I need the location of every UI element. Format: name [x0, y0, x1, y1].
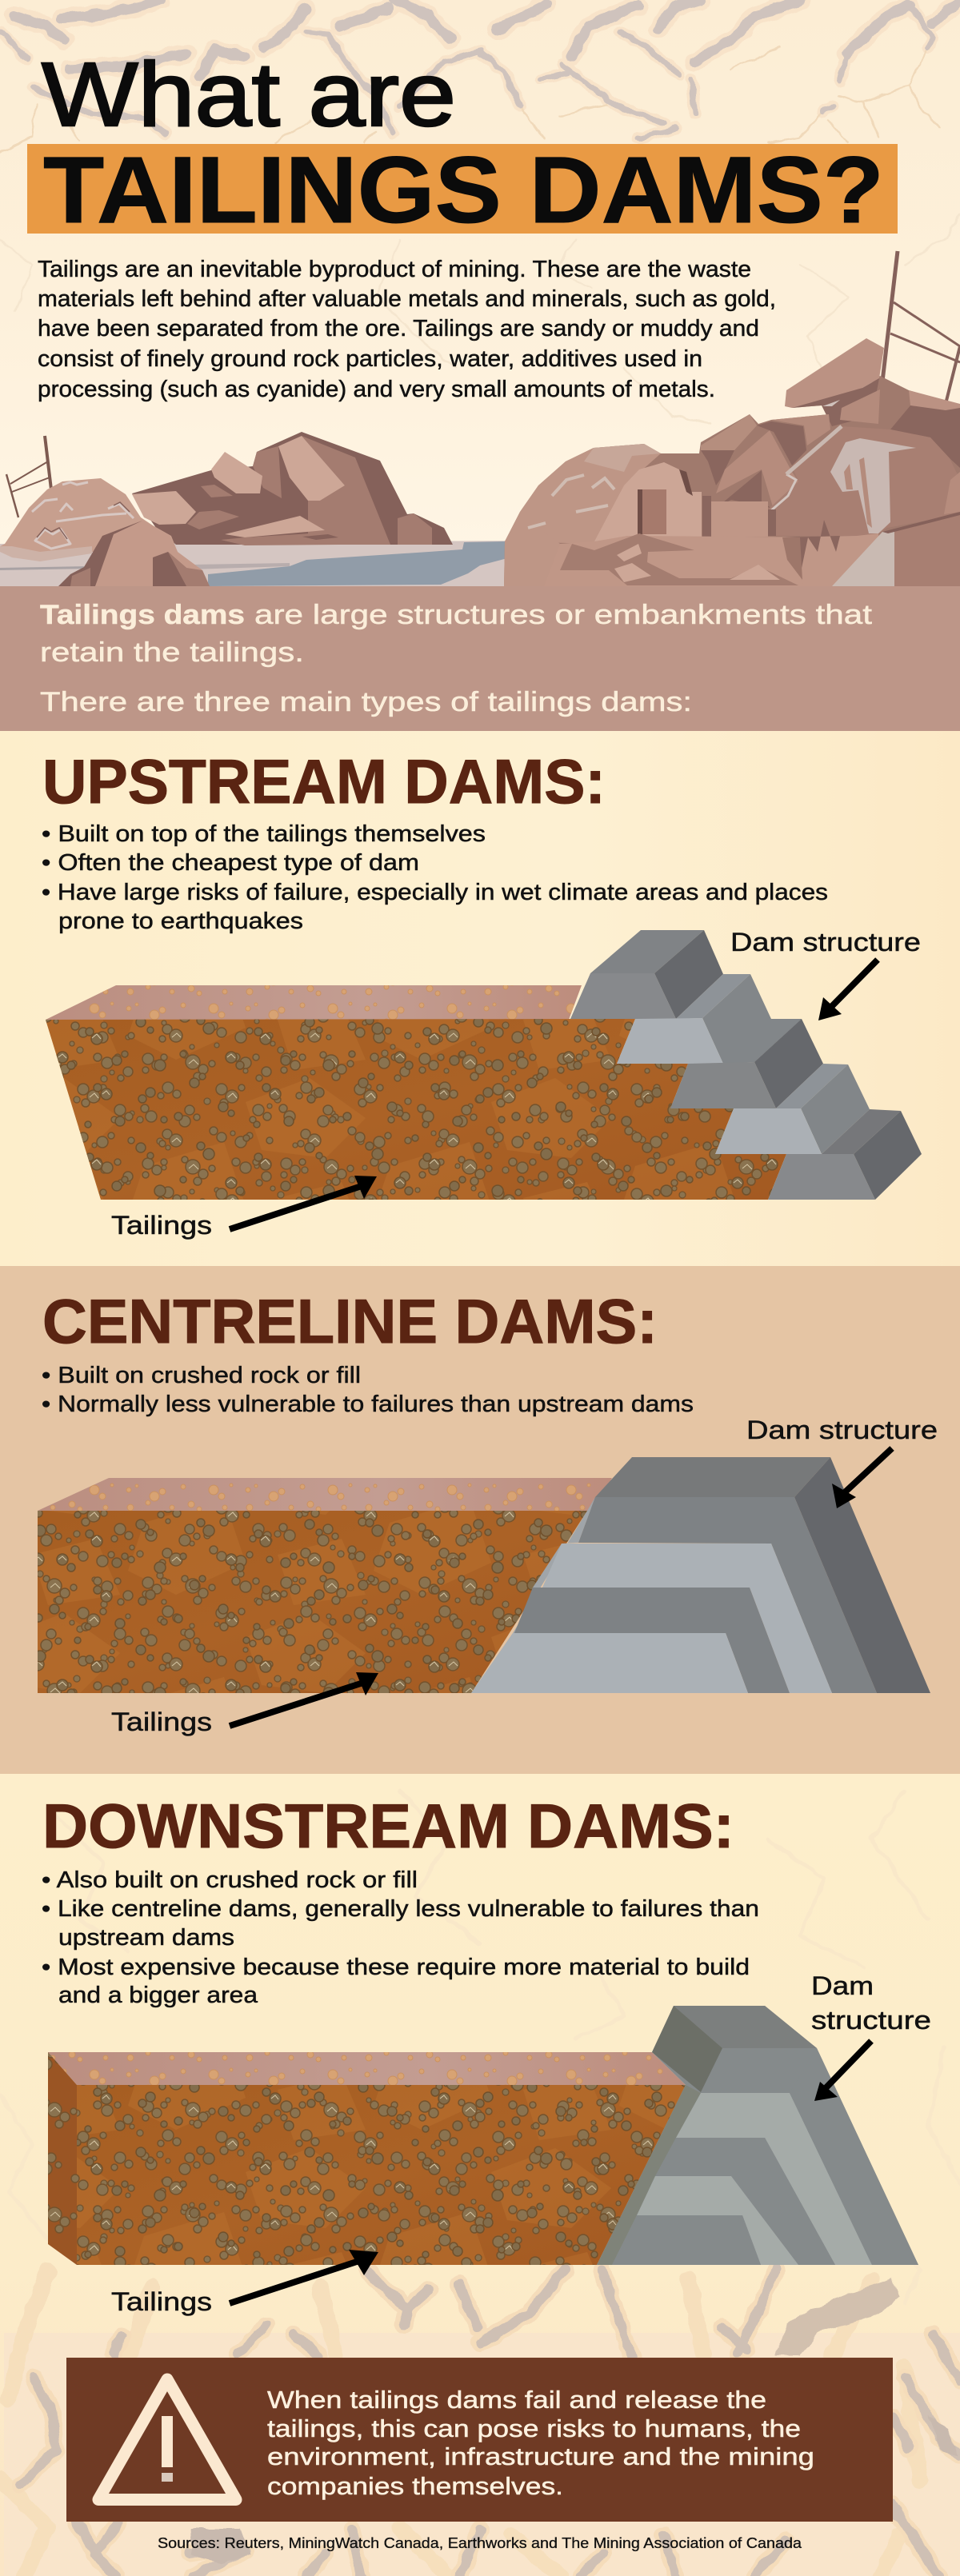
label: tailings: Tailings — [111, 1211, 212, 1240]
arrow: dam structure — [832, 1448, 892, 1508]
fence right — [877, 251, 960, 429]
text: intro paragraph: materials left behind after valuable metals and minerals, such as gold, — [38, 286, 776, 312]
text: warning: environment, infrastructure and the mining — [267, 2442, 814, 2470]
panel: upstream dams — [0, 731, 960, 1266]
bullets: upstream: • Have large risks of failure, especially in wet climate areas and places — [42, 880, 828, 905]
front rock left — [58, 520, 210, 586]
fence left — [6, 436, 51, 517]
label: dam structure: Dam structure — [730, 928, 921, 957]
bullets: centreline — [42, 1363, 694, 1417]
text: warning: companies themselves. — [267, 2472, 563, 2500]
bullets: upstream — [42, 821, 828, 934]
background: cracked earth header — [0, 0, 960, 592]
label: dam structure — [811, 1971, 931, 2035]
text: definition: There are three main types of tailings dams: — [40, 687, 692, 717]
label: tailings: Tailings — [111, 2287, 212, 2316]
bullets: centreline: • Built on crushed rock or fill — [42, 1363, 361, 1388]
bullets: downstream: • Like centreline dams, generally less vulnerable to failures than — [42, 1896, 759, 1922]
callout: failure warning — [66, 2358, 893, 2522]
bullets: upstream: prone to earthquakes — [58, 909, 303, 934]
heading: upstream: UPSTREAM DAMS: — [42, 746, 606, 817]
bullets: upstream: • Often the cheapest type of dam — [42, 850, 419, 876]
title: What are — [42, 44, 456, 145]
diagram: dam structure — [597, 2006, 918, 2265]
text: sources: Sources: Reuters, MiningWatch Canada, Earthworks and The Mining Association of Canada — [158, 2535, 802, 2551]
label: tailings: Tailings — [111, 1707, 212, 1736]
arrow: tailings — [230, 2250, 378, 2303]
text: warning: tailings, this can pose risks to humans, the — [267, 2414, 801, 2442]
text: intro paragraph: Tailings are an inevitable byproduct of mining. These are the waste — [38, 257, 751, 282]
diagram: tailings block — [48, 2052, 686, 2265]
label: dam structure: structure — [811, 2006, 931, 2035]
bullets: downstream: • Most expensive because these require more material to build — [42, 1955, 750, 1980]
band: dam definition — [0, 586, 960, 731]
title — [27, 44, 898, 243]
bullets: upstream: • Built on top of the tailings themselves — [42, 821, 486, 847]
bullets: downstream: upstream dams — [58, 1925, 234, 1951]
rock pile left — [132, 432, 453, 545]
text: definition: are large structures or embankments that — [254, 600, 873, 630]
text: intro paragraph: processing (such as cyanide) and very small amounts of metals. — [38, 377, 715, 402]
bullets: downstream: and a bigger area — [58, 1983, 258, 2008]
illustration: rocky mine landscape — [0, 251, 960, 588]
rock mass right — [504, 338, 960, 588]
background: cracked earth footer — [0, 1791, 960, 2576]
heading: centreline: CENTRELINE DAMS: — [42, 1286, 658, 1356]
bullets: centreline: • Normally less vulnerable to failures than upstream dams — [42, 1392, 694, 1417]
text: intro paragraph: consist of finely ground rock particles, water, additives used in — [38, 346, 702, 372]
arrow: tailings — [230, 1672, 378, 1726]
ground: sand and water — [0, 541, 552, 588]
arrow: tailings — [230, 1176, 377, 1229]
icon: warning triangle — [98, 2379, 236, 2500]
title highlight bar — [27, 144, 898, 234]
arrow: dam structure — [814, 2041, 871, 2101]
bullets: downstream — [42, 1867, 759, 2008]
bullets: downstream: • Also built on crushed rock or fill — [42, 1867, 418, 1893]
diagram: stepped dam structure — [570, 930, 922, 1200]
text: definition: retain the tailings. — [40, 637, 304, 668]
heading: downstream: DOWNSTREAM DAMS: — [42, 1791, 734, 1861]
panel: centreline dams — [0, 1266, 960, 1774]
text: warning: When tailings dams fail and release the — [267, 2386, 766, 2414]
diagram: tailings block — [46, 985, 786, 1200]
panel: downstream dams — [0, 1774, 960, 2576]
label: dam structure: Dam structure — [746, 1416, 938, 1444]
text: definition — [40, 600, 873, 717]
text: intro paragraph — [38, 257, 776, 402]
label: dam structure: Dam — [811, 1971, 874, 2000]
arrow: dam structure — [818, 960, 878, 1020]
text: warning — [267, 2386, 814, 2500]
mound left — [0, 478, 178, 561]
text: intro paragraph: have been separated from the ore. Tailings are sandy or muddy and — [38, 316, 759, 341]
text: definition: Tailings dams — [40, 600, 245, 630]
title: TAILINGS DAMS? — [43, 138, 884, 243]
diagram: tailings block — [38, 1478, 612, 1693]
diagram: dam structure — [471, 1457, 930, 1693]
